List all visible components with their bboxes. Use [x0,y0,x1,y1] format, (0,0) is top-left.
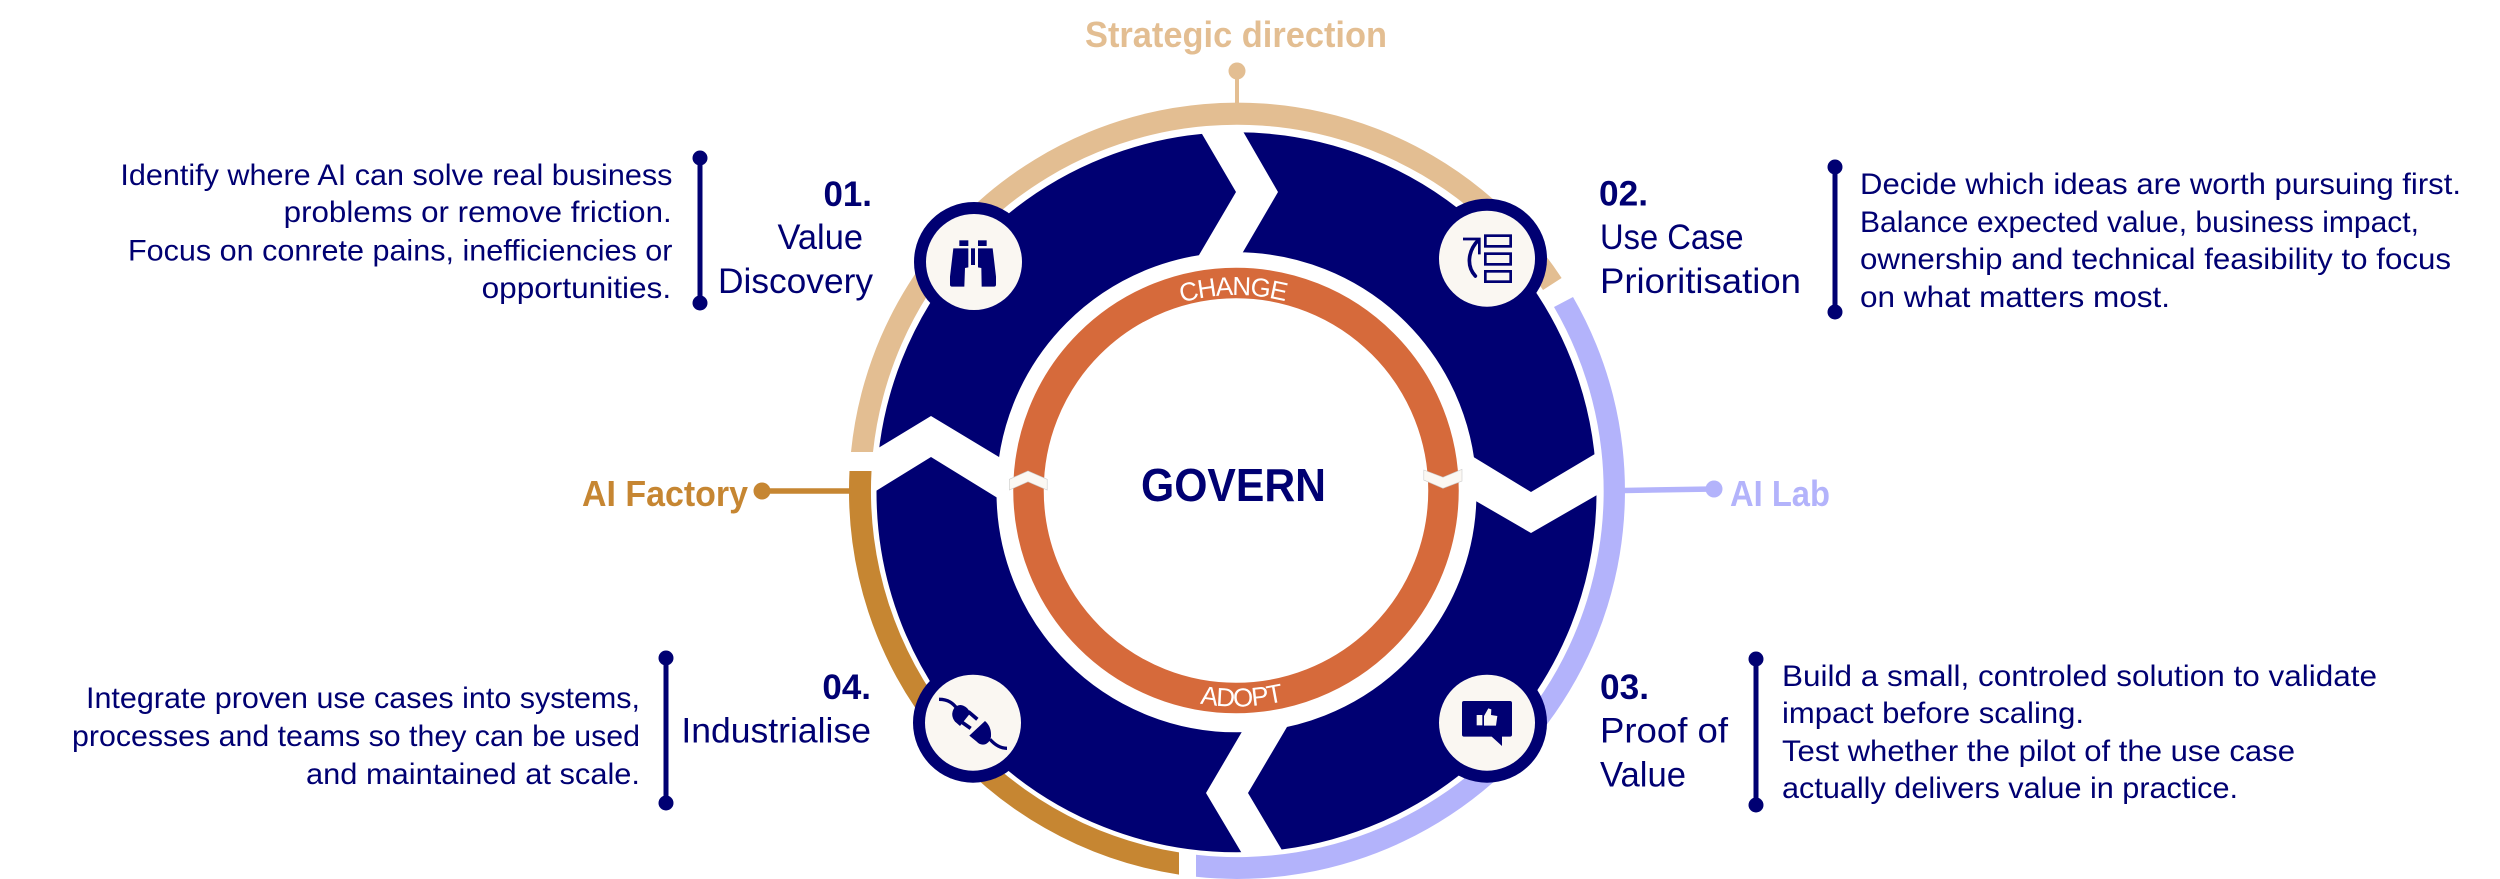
description: Focus on conrete pains, inefficiencies or [128,234,672,268]
step number and name [718,175,874,301]
step 01: Value Discovery [120,150,874,310]
step number and name [681,668,871,751]
description: and maintained at scale. [306,758,640,791]
description: Build a small, controled solution to validate [1782,660,2377,693]
divider with dots [1828,160,1842,320]
chevron: right, pointing down [1424,469,1462,488]
label: AI Factory [582,473,851,514]
description: Test whether the pilot of the use case [1782,735,2295,768]
step number and name: 03. [1600,668,1649,707]
step number and name: 04. [822,668,871,707]
step number and name: Proof of [1600,712,1728,751]
outer arc: strategic direction [851,103,1562,452]
step number and name: Value [1600,756,1686,795]
description: Integrate proven use cases into systems, [86,682,640,715]
outer arc: AI Factory [849,471,1179,875]
step number and name: 02. [1599,175,1648,214]
divider with dots [1748,652,1764,812]
step number and name: Discovery [718,262,874,301]
divider with dots [692,150,708,310]
label: Strategic direction: Strategic direction [1085,14,1387,55]
step 03: Proof of Value [1600,652,2377,812]
description: Balance expected value, business impact, [1860,206,2419,239]
navy cycle ring with four chevron-separated segments [865,121,1610,867]
description [72,682,640,791]
step 04: Industrialise [72,650,871,810]
ring label: CHANGE: CHANGE [1180,277,1288,301]
description: ownership and technical feasibility to focus [1860,243,2451,276]
description [120,159,672,305]
step number and name: Prioritisation [1600,262,1801,301]
step 02: Use Case Prioritisation [1599,160,2461,320]
description: Decide which ideas are worth pursuing first. [1860,168,2461,201]
icon: prioritised list with arrow [1427,199,1547,319]
label: AI Factory: AI Factory [582,473,748,514]
step number and name [1599,175,1801,301]
description: opportunities. [482,272,671,305]
ring label: ADOPT: ADOPT [1200,684,1280,707]
label: Strategic direction [1085,14,1387,104]
description: processes and teams so they can be used [72,720,640,753]
description: Identify where AI can solve real business [120,159,672,192]
icon: plug and socket [913,663,1033,783]
description: on what matters most. [1860,281,2170,314]
label: AI Lab: AI Lab [1730,473,1830,514]
description: problems or remove friction. [284,196,672,229]
step number and name: Industrialise [681,712,871,751]
step number and name: 01. [824,175,872,214]
label: AI Lab [1624,473,1830,514]
chevron: left, pointing up [1009,471,1047,490]
step number and name: Value [778,218,863,257]
step number and name [1600,668,1728,795]
outer arc: AI Lab [1196,297,1625,879]
inner ring: change and adopt [1009,268,1462,714]
step number and name: Use Case [1600,218,1744,257]
divider with dots [658,650,674,810]
description: impact before scaling. [1782,697,2084,730]
centre title: GOVERN [1141,459,1326,511]
description: actually delivers value in practice. [1782,772,2238,805]
description [1782,660,2377,805]
icon: thumbs-up speech bubble [1427,663,1547,783]
description [1860,168,2461,314]
icon: binoculars [914,202,1034,322]
